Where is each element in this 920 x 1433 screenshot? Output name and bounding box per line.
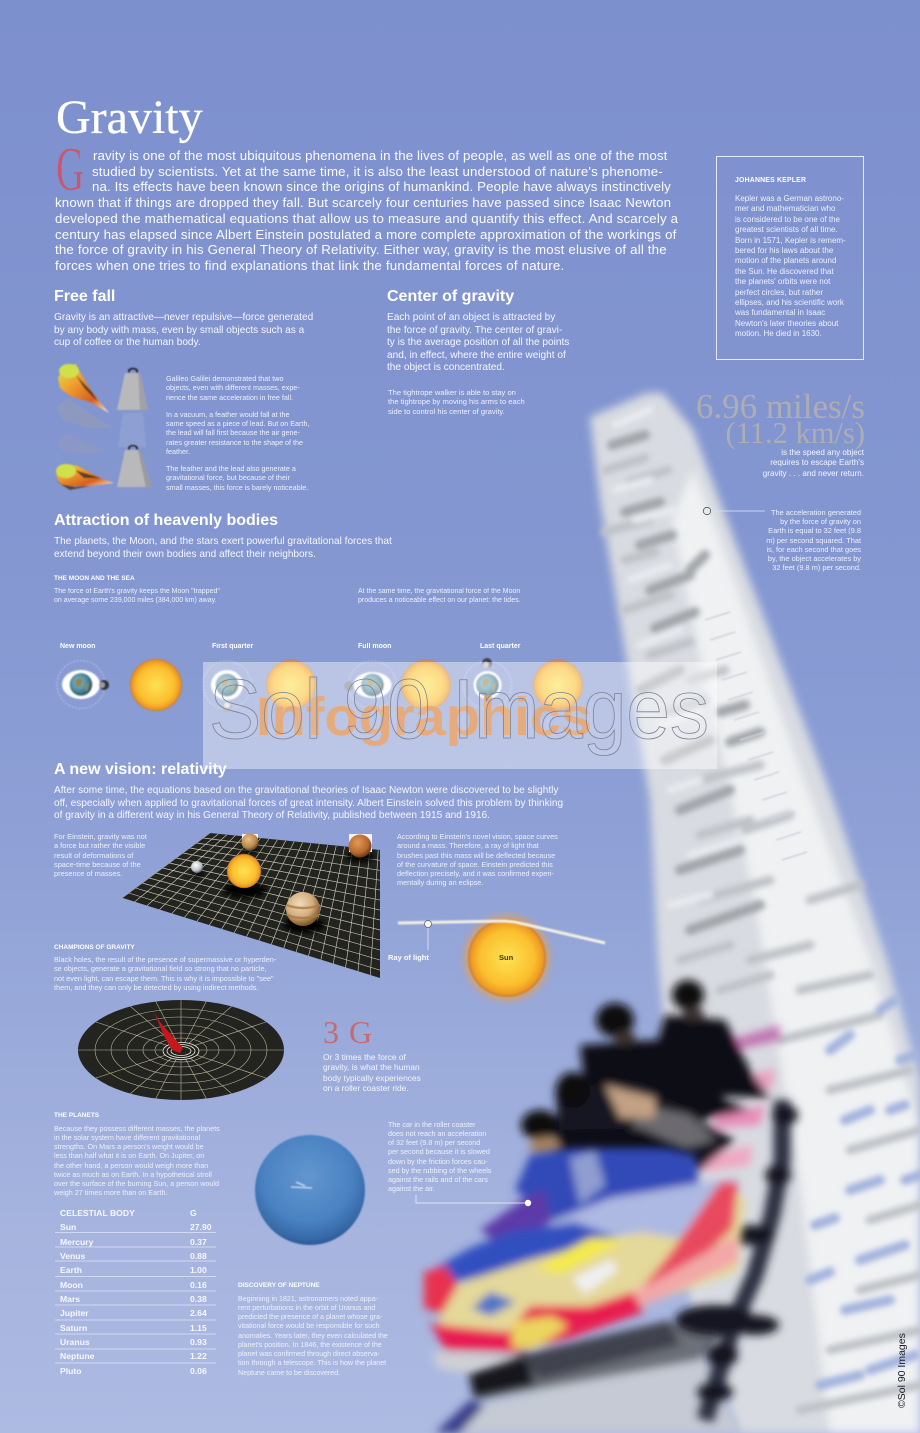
planets text: the other hand, a person would weigh more than xyxy=(54,1160,208,1170)
Einstein text: presence of masses. xyxy=(54,869,122,878)
tightrope text: side to control his center of gravity. xyxy=(388,406,505,416)
acceleration text: by the force of gravity on xyxy=(780,517,861,526)
text: 1.00 xyxy=(190,1265,207,1275)
moon text left: The force of Earth's gravity keeps the Moon "trapped" xyxy=(54,588,220,595)
Einstein text: space-time because of the xyxy=(54,860,141,869)
intro text: the force of gravity in his General Theory of Relativity. Either way, gravity is the most elusive of all the xyxy=(55,242,667,257)
moon text right: produces a noticeable effect on our planet: the tides. xyxy=(358,597,521,604)
text: Full moon xyxy=(358,643,391,650)
champions text: se objects, generate a gravitational field so strong that no particle, xyxy=(54,964,267,973)
car text: The car in the roller coaster xyxy=(388,1120,476,1128)
escape velocity text xyxy=(763,448,864,478)
Kepler box border xyxy=(716,156,864,360)
Kepler text xyxy=(735,194,846,338)
champions text: them, and they can only be detected by using indirect methods. xyxy=(54,983,258,992)
first quarter xyxy=(203,661,251,712)
intro text: forces when one tries to find explanations that link the fundamental forces of nature. xyxy=(55,258,564,273)
relativity text: off, especially when applied to gravitational forces of great intensity. Albert Einstein solved this problem by thinking xyxy=(54,798,563,809)
car text: sed by the rubbing of the wheels xyxy=(388,1166,492,1175)
Kepler text: Born in 1571, Kepler is remem- xyxy=(735,236,846,245)
champions heading: CHAMPIONS OF GRAVITY xyxy=(54,944,135,951)
tightrope text xyxy=(388,388,525,416)
intro text: studied by scientists. Yet at the same time, it is also the least understood of nature's phenome- xyxy=(92,164,663,179)
center of gravity text: the object is concentrated. xyxy=(387,362,505,373)
Galileo text: small masses, this force is barely noticeable. xyxy=(166,482,308,492)
curved space text: mentally during an eclipse. xyxy=(397,878,483,887)
Kepler text: bered for his laws about the xyxy=(735,246,833,255)
discovery text: rent perturbations in the orbit of Uranus and xyxy=(238,1304,375,1312)
tightrope text: The tightrope walker is able to stay on xyxy=(388,388,516,397)
planets text: weigh 27 times more than on Earth. xyxy=(54,1188,167,1197)
Galileo text: the lead will fall first because the air gene- xyxy=(166,428,300,437)
Kepler text: is considered to be one of the xyxy=(735,215,840,224)
table: celestial gravity xyxy=(60,1208,212,1376)
acceleration text: by, the object accelerates by xyxy=(768,554,861,563)
intro text: na. Its effects have been known since the origins of humankind. People have always instinctively xyxy=(92,179,671,194)
full moon xyxy=(344,661,396,709)
3 G text xyxy=(323,1052,421,1093)
text: G xyxy=(190,1208,197,1218)
watermark: Sol 90 Images xyxy=(209,662,709,756)
text: Saturn xyxy=(60,1323,87,1333)
Galileo text: same speed as a piece of lead. But on Earth, xyxy=(166,419,309,428)
sun label: Sun xyxy=(499,953,513,962)
Galileo text: Galileo Galilei demonstrated that two xyxy=(166,374,283,383)
car text xyxy=(388,1120,492,1193)
3 G figure: 3 G xyxy=(323,1014,373,1050)
text: 0.88 xyxy=(190,1251,207,1261)
heading: free fall: Free fall xyxy=(54,288,115,305)
center of gravity text xyxy=(387,312,569,373)
text: First quarter xyxy=(212,643,253,650)
intro text: ravity is one of the most ubiquitous phenomena in the lives of people, as well as one of the most xyxy=(93,148,667,163)
planets heading: THE PLANETS xyxy=(54,1112,99,1119)
moon text left: on average some 239,000 miles (384,000 km) away. xyxy=(54,597,217,604)
Einstein text: For Einstein, gravity was not xyxy=(54,832,147,841)
discovery text: Neptune came to be discovered. xyxy=(238,1368,340,1376)
curved space text: around a mass. Therefore, a ray of light that xyxy=(397,841,539,850)
escape velocity text: is the speed any object xyxy=(781,448,864,457)
acceleration text: is, for each second that goes xyxy=(766,545,861,554)
car text: per second because it is slowed xyxy=(388,1147,490,1156)
discovery text: Beginning in 1821, astronomers noted appa- xyxy=(238,1294,378,1302)
Neptune xyxy=(255,1135,365,1245)
escape velocity text: gravity . . . and never return. xyxy=(763,469,864,478)
panel: Johannes Kepler xyxy=(735,177,846,338)
car text: does not reach an acceleration xyxy=(388,1129,486,1138)
attraction text: extend beyond their own bodies and affect their neighbors. xyxy=(54,549,316,560)
Kepler text: the planets' orbits were not xyxy=(735,277,830,286)
free fall text: Gravity is an attractive—never repulsive—force generated xyxy=(54,312,313,323)
3 G text: gravity, is what the human xyxy=(323,1062,420,1072)
text: Pluto xyxy=(60,1366,81,1376)
text: Earth xyxy=(60,1265,82,1275)
Kepler text: greatest scientists of all time. xyxy=(735,225,838,234)
rail and chassis xyxy=(435,1305,750,1433)
intro text: century has elapsed since Albert Einstein postulated a more complete approximation of the workings of xyxy=(55,227,677,242)
car text: down by the friction forces cau- xyxy=(388,1156,487,1166)
text: Neptune xyxy=(60,1351,94,1361)
escape velocity figure xyxy=(696,387,865,450)
Kepler text: motion. He died in 1630. xyxy=(735,329,822,338)
planets text: less than half what it is on Earth. On Jupiter, on xyxy=(54,1151,204,1160)
acceleration text: m) per second squared. That xyxy=(766,536,861,545)
Galileo text: rience the same acceleration in free fall. xyxy=(166,392,293,402)
champions text: not even light, can escape them. This is why it is impossible to "see" xyxy=(54,974,274,982)
space-time grid with planets xyxy=(122,833,395,985)
planets text: strengths. On Mars a person's weight would be xyxy=(54,1142,204,1151)
moon and the sea heading: THE MOON AND THE SEA xyxy=(54,575,135,582)
planets text: twice as much as on Earth. In a hypothetical stroll xyxy=(54,1170,212,1179)
discovery text: vitational force would be responsible for such xyxy=(238,1322,380,1330)
title: Gravity xyxy=(56,91,203,144)
text: Jupiter xyxy=(60,1308,89,1318)
black hole diagram xyxy=(78,1000,284,1100)
Kepler text: Kepler was a German astrono- xyxy=(735,194,844,203)
text: 27.90 xyxy=(190,1222,212,1232)
ray of light and sun xyxy=(398,914,605,1002)
leader lines xyxy=(416,507,765,1206)
text: 0.06 xyxy=(190,1366,207,1376)
tightrope text: the tightrope by moving his arms to each xyxy=(388,397,525,406)
text: Sun xyxy=(60,1222,76,1232)
heading: attraction of heavenly bodies: Attraction of heavenly bodies xyxy=(54,512,278,529)
discovery text xyxy=(238,1294,388,1376)
text: 2.64 xyxy=(190,1308,207,1318)
text: Mars xyxy=(60,1294,80,1304)
discovery text: planet was confirmed through direct observa- xyxy=(238,1350,380,1358)
champions text xyxy=(54,955,276,992)
relativity text: After some time, the equations based on the gravitational theories of Isaac Newton were discovered to be slightly xyxy=(54,785,558,796)
text: Last quarter xyxy=(480,643,520,650)
riders xyxy=(521,980,780,1172)
tower xyxy=(590,393,920,1433)
escape velocity figure: 6.96 miles/s xyxy=(696,387,865,426)
moon phases diagram xyxy=(57,658,583,712)
text: 0.38 xyxy=(190,1294,207,1304)
relativity text: of gravity in a different way in his General Theory of Relativity, published between 1915 and 1916. xyxy=(54,810,490,821)
text: Venus xyxy=(60,1251,85,1261)
center of gravity text: ty is the average position of all the points xyxy=(387,337,569,348)
Kepler text: Newton's later theories about xyxy=(735,319,838,328)
text: 0.37 xyxy=(190,1237,207,1247)
relativity text xyxy=(54,785,563,821)
escape velocity text: requires to escape Earth's xyxy=(770,458,864,467)
discovery text: predicted the presence of a planet whose gra- xyxy=(238,1313,382,1321)
Kepler text: motion of the planets around xyxy=(735,256,836,265)
car xyxy=(424,1148,745,1374)
planets text: over the surface of the burning Sun, a person would xyxy=(54,1179,219,1188)
Kepler text: the Sun. He discovered that xyxy=(735,267,834,276)
acceleration text: The acceleration generated xyxy=(771,508,861,517)
bold table rules xyxy=(55,1232,216,1363)
new moon xyxy=(57,660,109,708)
acceleration text: 32 feet (9.8 m) per second. xyxy=(772,563,861,572)
free fall text: cup of coffee or the human body. xyxy=(54,337,201,348)
center of gravity text: the force of gravity. The center of gravi- xyxy=(387,325,562,336)
text: 0.16 xyxy=(190,1280,207,1290)
attraction text: The planets, the Moon, and the stars exert powerful gravitational forces that xyxy=(54,536,392,547)
escape velocity figure: (11.2 km/s) xyxy=(726,416,865,450)
text: Mercury xyxy=(60,1237,93,1247)
text: Moon xyxy=(60,1280,83,1290)
3 G text: on a roller coaster ride. xyxy=(323,1083,409,1093)
heading: center of gravity: Center of gravity xyxy=(387,288,514,305)
planets text: Because they possess different masses, the planets xyxy=(54,1124,220,1132)
text: 1.22 xyxy=(190,1351,207,1361)
curved space text: brushes past this mass will be deflected because xyxy=(397,850,555,860)
Galileo text: rates greater resistance to the shape of the xyxy=(166,438,303,446)
moon text right xyxy=(358,588,521,604)
Kepler text: was fundamental in Isaac xyxy=(735,308,825,317)
discovery heading: DISCOVERY OF NEPTUNE xyxy=(238,1282,320,1289)
3 G text: body typically experiences xyxy=(323,1073,421,1083)
copyright: ©Sol 90 Images xyxy=(896,1333,908,1408)
watermark: Infographics xyxy=(256,687,592,747)
text: CELESTIAL BODY xyxy=(60,1208,135,1218)
car text: against the rails and of the cars xyxy=(388,1175,488,1184)
Kepler text: mer and mathematician who xyxy=(735,204,836,213)
Einstein text: a force but rather the visible xyxy=(54,841,145,850)
Galileo text: The feather and the lead also generate a xyxy=(166,464,296,473)
center of gravity text: Each point of an object is attracted by xyxy=(387,312,555,323)
Galileo text: In a vacuum, a feather would fall at the xyxy=(166,410,289,419)
Einstein text xyxy=(54,832,147,878)
text: 0.93 xyxy=(190,1337,207,1347)
dark track column xyxy=(675,1100,798,1420)
Kepler text: perfect circles, but rather xyxy=(735,288,823,297)
intro text: developed the mathematical equations that allow us to measure and quantify this effect. And scarcely a xyxy=(55,211,678,226)
moon text right: At the same time, the gravitational force of the Moon xyxy=(358,588,520,595)
car text: of 32 feet (9.8 m) per second xyxy=(388,1138,480,1147)
curved space text: According to Einstein's novel vision, space curves xyxy=(397,832,558,841)
Kepler heading: JOHANNES KEPLER xyxy=(735,177,806,184)
intro text xyxy=(55,148,678,273)
planets text: in the solar system have different gravitational xyxy=(54,1133,200,1142)
curved space text xyxy=(397,832,558,887)
acceleration text: Earth is equal to 32 feet (9.8 xyxy=(768,526,861,535)
intro text: known that if things are dropped they fall. But scarcely four centuries have passed since Isaac Newton xyxy=(55,195,671,210)
Einstein text: result of deformations of xyxy=(54,850,133,860)
drop cap: G xyxy=(56,136,84,204)
Galileo text: feather. xyxy=(166,447,190,456)
discovery text: planet's position. In 1846, the existence of the xyxy=(238,1341,382,1349)
text: 1.15 xyxy=(190,1323,207,1333)
free fall text: by any body with mass, even by small objects such as a xyxy=(54,325,304,336)
free fall text xyxy=(54,312,313,348)
feather and lead illustration xyxy=(56,364,152,490)
curved space text: deflection precisely, and it was confirmed experi- xyxy=(397,869,554,878)
ray label: Ray of light xyxy=(388,953,429,962)
moon text left xyxy=(54,588,220,604)
attraction text xyxy=(54,536,392,560)
car text: against the air. xyxy=(388,1184,435,1193)
curved space text: of the curvature of space. Einstein predicted this xyxy=(397,860,553,869)
acceleration text xyxy=(766,508,861,572)
planets text xyxy=(54,1124,220,1197)
Kepler text: ellipses, and his scientific work xyxy=(735,298,844,307)
text: Uranus xyxy=(60,1337,90,1347)
Galileo text: gravitational force, but because of their xyxy=(166,473,290,482)
3 G text: Or 3 times the force of xyxy=(323,1052,406,1062)
heading: a new vision: A new vision: relativity xyxy=(54,761,227,778)
phase labels: New moon xyxy=(60,643,95,650)
champions text: Black holes, the result of the presence of supermassive or hyperden- xyxy=(54,955,276,964)
Galileo text: objects, even with different masses, expe- xyxy=(166,383,300,392)
center of gravity text: and, in effect, where the entire weight of xyxy=(387,350,566,361)
last quarter xyxy=(464,658,512,709)
Galileo text xyxy=(166,374,309,492)
discovery text: anomalies. Years later, they even calculated the xyxy=(238,1332,388,1340)
discovery text: tion through a telescope. This is how the planet xyxy=(238,1359,386,1367)
